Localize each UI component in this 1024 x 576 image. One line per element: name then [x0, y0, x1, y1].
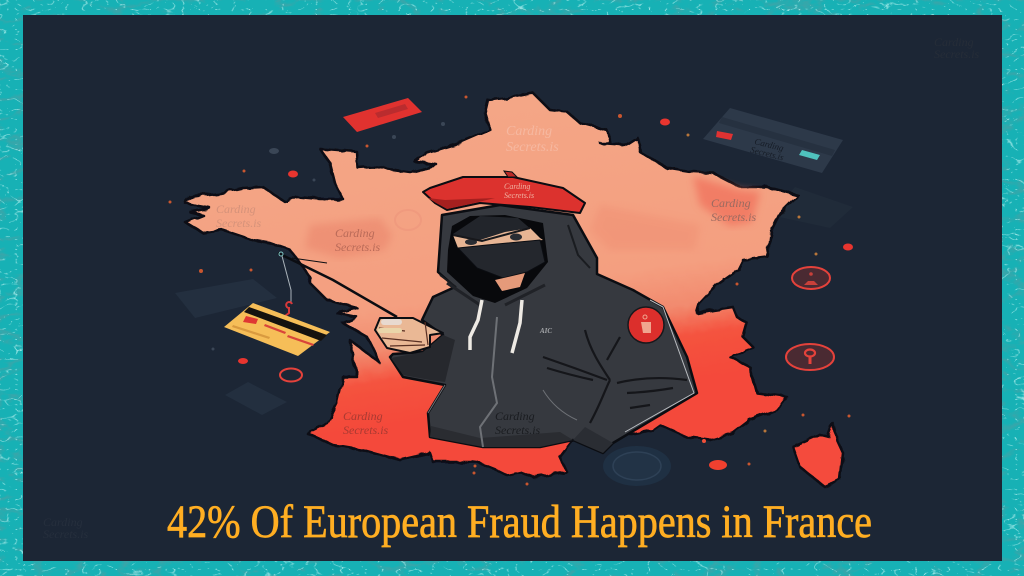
drawstring right [512, 300, 522, 353]
sleeve folds [543, 330, 687, 423]
sleeve highlight [625, 300, 694, 432]
watermark west: Carding [335, 226, 375, 240]
watermark north: Carding [506, 124, 552, 139]
watermark south west: Carding [343, 409, 383, 423]
shoulder patch [628, 307, 664, 343]
watermark west: Secrets.is [335, 240, 381, 254]
dark card top right [703, 108, 843, 173]
watermark east: Secrets.is [711, 210, 757, 224]
eye band [453, 228, 543, 248]
watermark south west: Secrets.is [343, 423, 389, 437]
watermark east: Carding [711, 196, 751, 210]
watermark top right: Carding [934, 35, 974, 49]
hood fold [440, 225, 590, 287]
watermark Brittany: Carding [216, 202, 256, 216]
faint background cards and badge [175, 187, 853, 486]
map tonal regions [305, 176, 760, 258]
gold credit card [224, 303, 330, 356]
Corsica [793, 423, 843, 487]
head top [453, 216, 540, 243]
watermark north: Secrets.is [506, 140, 559, 155]
zipper [480, 317, 497, 447]
drawstring left [470, 300, 482, 350]
decorative dots [168, 96, 853, 486]
watermark dark card: Carding [754, 136, 785, 153]
map of France [185, 93, 798, 477]
watermark hoodie: Carding [495, 409, 535, 423]
watermark dark card: Secrets.is [749, 144, 785, 163]
red card top [343, 98, 422, 132]
hem [430, 426, 573, 447]
watermark bottom left: Secrets.is [43, 527, 89, 541]
watermark beret: Secrets.is [504, 191, 534, 200]
beret [423, 177, 585, 213]
red ring icon upper [792, 267, 830, 289]
watermark bottom left: Carding [43, 515, 83, 529]
watermark hoodie: Secrets.is [495, 423, 541, 437]
face mask [458, 240, 545, 278]
chest logo text: AIC [539, 327, 552, 335]
watermark Brittany: Secrets.is [216, 216, 262, 230]
pocket [428, 385, 577, 420]
left forearm shadow [391, 335, 455, 382]
title: 42% Of European Fraud Happens in France [167, 496, 872, 548]
empty red ring [280, 368, 302, 382]
hood interior [447, 215, 548, 303]
hacker figure [375, 171, 697, 453]
fishing rod, line and hook [278, 252, 397, 317]
red ring icon lower [786, 344, 834, 370]
hoodie torso [390, 205, 697, 453]
watermark beret: Carding [504, 182, 530, 191]
watermark top right: Secrets.is [934, 47, 980, 61]
neck [495, 273, 525, 291]
fist [375, 318, 443, 353]
